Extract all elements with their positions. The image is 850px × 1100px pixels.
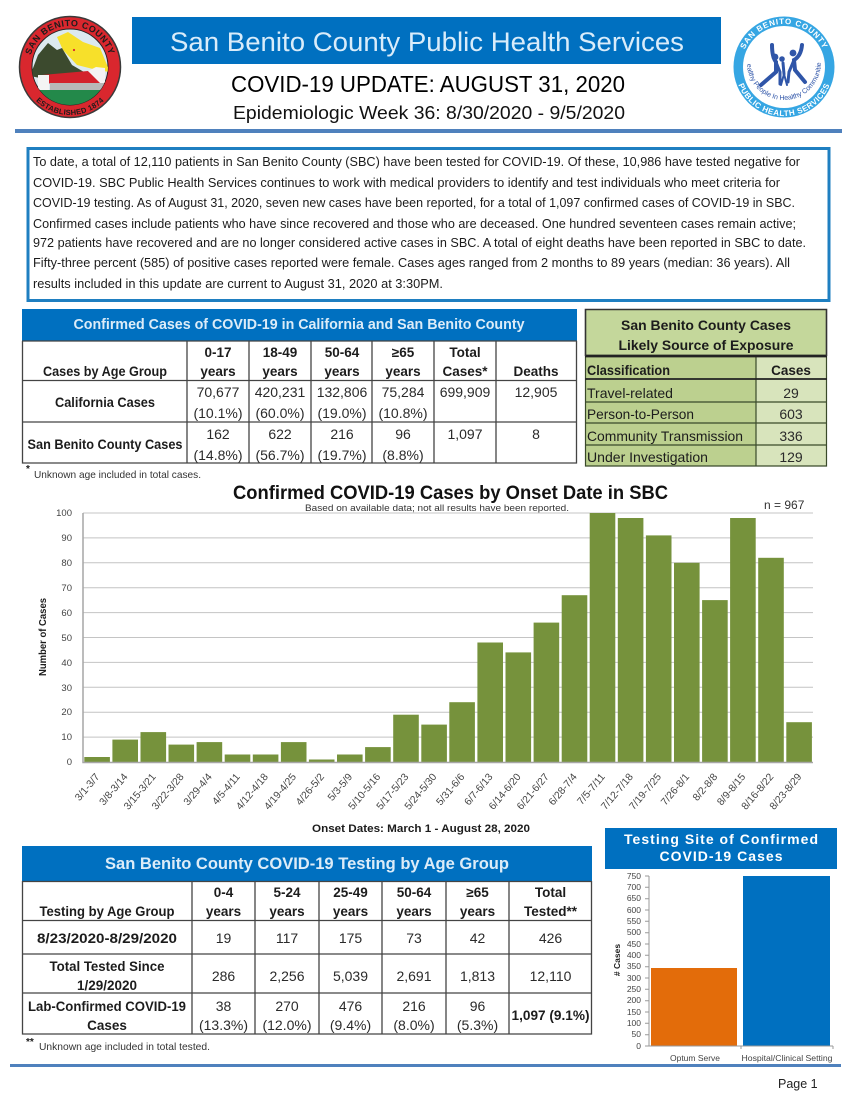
row: lab-confirmed cases: (8.0%) [393,1017,435,1033]
table header row: years [324,364,360,379]
table header row: years [262,364,298,379]
chart subtitle: Based on available data; not all results have been reported. [305,503,569,514]
testing header row: Testing by Age Group [40,904,174,919]
y-axis labels: 100 [56,508,72,519]
testing header row: ≥65 [466,885,489,900]
x-axis date labels: 5/17-5/23 [375,772,411,812]
row: week of 8/23: 42 [470,930,485,946]
row: week of 8/23 [37,930,562,946]
footnote: Unknown age included in total cases. [34,469,201,481]
panel: likely source of exposure table [585,309,827,466]
x-axis date labels: 8/23-8/29 [768,772,805,812]
x-axis date labels: 4/19-4/25 [263,772,299,812]
row: San Benito County cases: (8.8%) [382,447,424,463]
testing site x-axis: Hospital/Clinical Setting [742,1053,833,1063]
row: San Benito County cases: 216 [330,426,354,442]
row: total tested: 2,691 [396,968,432,984]
table header row: ≥65 [392,345,415,360]
testing header row: 25-49 [333,885,368,900]
testing table heading: San Benito County COVID-19 Testing by Age Group [105,854,509,873]
exposure table rows: Travel-related [587,385,673,401]
table header row: Total [449,345,481,360]
testing site y-axis: 250 [627,984,641,994]
table header row: Deaths [513,364,559,379]
table header row: 50-64 [325,345,360,360]
y-axis labels: 60 [61,608,72,619]
sample size note: n = 967 [764,498,805,512]
x-axis date labels: 5/3-5/9 [326,772,355,803]
bar: Optum Serve [651,968,737,1046]
row: San Benito County cases: (19.7%) [317,447,367,463]
testing site y-axis [627,871,649,1051]
logo: Public Health Services: SAN BENITO COUNTY [740,18,828,49]
text block: summary: results included in this update are current to August 31, 2020 at 3:30PM. [33,276,443,291]
x-axis date labels: 6/28-7/4 [547,772,580,808]
testing header row: years [396,904,432,919]
exposure table rows: 129 [779,449,803,465]
row: lab-confirmed cases: (13.3%) [199,1017,248,1033]
row: California cases: (60.0%) [255,405,305,421]
exposure table title: Likely Source of Exposure [618,337,794,353]
row: lab-confirmed cases: 1,097 (9.1%) [512,1008,590,1023]
exposure table rows: 336 [779,428,803,444]
panel: testing site chart [605,828,837,1063]
exposure table title: San Benito County Cases [621,317,791,333]
row: San Benito County cases [28,426,540,463]
y-axis labels: 0 [67,757,72,768]
row: total tested: 2,256 [269,968,305,984]
y-axis labels: 90 [61,533,72,544]
table header row: 18-49 [263,345,297,360]
row: week of 8/23: 117 [276,930,298,946]
row: lab-confirmed cases: 476 [339,998,362,1014]
x-axis date labels: 3/8-3/14 [98,772,131,808]
row: San Benito County cases: (56.7%) [255,447,305,463]
row: lab-confirmed cases: (9.4%) [330,1017,371,1033]
testing table heading [22,846,592,881]
testing footnote: Unknown age included in total tested. [39,1041,210,1053]
text block: summary: Fifty-three percent (585) of positive cases reported were female. Cases ages ranged from 2 months to 89 years (median: 36 years). All [33,255,790,270]
x-axis date labels: 7/5-7/11 [576,772,608,807]
x-axis date labels: 3/15-3/21 [122,772,159,812]
row: total tested [50,959,572,993]
table header row [43,345,559,379]
testing footnote [26,1037,210,1053]
exposure table rows: Person-to-Person [587,406,694,422]
chart title: Confirmed COVID-19 Cases by Onset Date in SBC [233,483,668,504]
testing site x-axis [649,1046,833,1063]
testing site y-axis: 350 [627,961,641,971]
testing site y-axis: 0 [636,1041,641,1051]
testing site y-axis: 550 [627,916,641,926]
row: San Benito County cases: 622 [268,426,292,442]
exposure table rows: Under Investigation [587,449,708,465]
row: lab-confirmed cases: (5.3%) [457,1017,498,1033]
x-axis date labels: 7/12-7/18 [600,772,636,812]
row: lab-confirmed cases: 216 [402,998,426,1014]
testing header row: Total [535,885,566,900]
x-axis date labels: 7/19-7/25 [628,772,664,812]
y-axis labels: 50 [61,633,72,644]
exposure table rows: 603 [779,406,803,422]
row: total tested: Total Tested Since [50,959,165,974]
row: total tested: 1,813 [460,968,495,984]
testing footnote: ** [26,1037,34,1048]
row: San Benito County cases: 1,097 [447,426,483,442]
row: week of 8/23: 8/23/2020-8/29/2020 [37,931,177,946]
divider [15,129,842,133]
testing header row: 50-64 [397,885,432,900]
exposure table rows: 29 [783,385,799,401]
testing site heading: Testing Site of Confirmed [624,831,818,847]
testing header row: years [206,904,241,919]
row: California cases: California Cases [55,395,155,410]
row: California cases: 132,806 [317,384,368,400]
row: San Benito County cases: 8 [532,426,540,442]
testing table grid [22,881,592,1034]
testing site y-axis: 650 [627,893,641,903]
footnote: * [26,464,30,475]
row: week of 8/23: 19 [216,930,231,946]
table header row: years [385,364,421,379]
footnote [26,464,201,481]
row: San Benito County cases: (14.8%) [193,447,243,463]
x-axis date labels: 5/31-6/6 [435,772,468,808]
page number: Page 1 [778,1077,818,1091]
x-axis date labels: 8/9-8/15 [715,772,748,808]
row: week of 8/23: 73 [406,930,422,946]
testing site y-axis: 750 [627,871,641,881]
heading: update date: COVID-19 UPDATE: AUGUST 31, 2020 [231,71,625,97]
testing header row: Tested** [524,904,578,919]
x-axis date labels: 3/22-3/28 [150,772,187,812]
testing site y-axis: 100 [627,1018,641,1028]
row: total tested: 286 [212,968,235,984]
x-axis date labels: 3/29-4/4 [182,772,215,808]
row: total tested: 12,110 [530,968,572,984]
text block: summary: To date, a total of 12,110 patients in San Benito County (SBC) have been tested for COVID-19. Of these, 10,986 have tested negative for [33,154,801,169]
row: California cases: (19.0%) [317,405,367,421]
row: lab-confirmed cases [28,998,590,1033]
table heading: Confirmed Cases of COVID-19 in California and San Benito County [74,317,524,333]
row: lab-confirmed cases: 38 [216,998,231,1014]
testing site y-axis: 200 [627,995,641,1005]
x-axis date labels: 6/14-6/20 [487,772,524,812]
divider [10,1064,841,1067]
row: lab-confirmed cases: 96 [470,998,485,1014]
testing header row: years [269,904,305,919]
panel: testing by age group table [22,846,592,1053]
exposure table rows: Community Transmission [587,428,743,444]
row: San Benito County cases: San Benito County Cases [28,437,182,452]
logo: San Benito County seal: ESTABLISHED 1874 [36,97,104,116]
y-axis labels [56,508,72,768]
heading: epidemiologic week: Epidemiologic Week 36: 8/30/2020 - 9/5/2020 [233,103,625,123]
y-axis labels: 30 [61,683,72,694]
text block: summary: COVID-19 testing. As of August 31, 2020, seven new cases have been reported, for a total of 1,097 confirmed cases of COVID-19 in SBC. [33,195,795,210]
logo: San Benito County seal: SAN BENITO COUNTY [26,20,115,54]
testing site y-axis: 150 [627,1007,641,1017]
row: total tested: 1/29/2020 [77,978,137,993]
row: California cases [55,384,558,421]
x-axis date labels [73,772,805,812]
testing site x-axis: Optum Serve [670,1053,720,1063]
panel: confirmed cases table [22,309,577,481]
bar chart: cases by onset date [37,508,813,835]
testing site y-axis title: # Cases [612,944,622,976]
y-axis labels: 80 [61,558,72,569]
y-axis labels: 20 [61,707,72,718]
y-axis labels: 70 [61,583,72,594]
x-axis date labels: 4/12-4/18 [235,772,271,812]
x-axis title: Onset Dates: March 1 - August 28, 2020 [312,823,530,835]
row: lab-confirmed cases: 270 [275,998,299,1014]
table grid [22,341,577,463]
bar: Hospital/Clinical Setting [743,876,830,1046]
row: California cases: (10.1%) [193,405,243,421]
exposure table rows: Cases [771,363,811,378]
row: week of 8/23: 175 [339,930,362,946]
text block: summary: 972 patients have recovered and are no longer considered active cases in SBC. A total of eight deaths have been reported in SBC to date. [33,235,806,250]
logo: Public Health Services [734,16,834,118]
row: lab-confirmed cases: (12.0%) [262,1017,312,1033]
title banner: San Benito County Public Health Services [170,27,684,57]
testing site y-axis: 450 [627,939,641,949]
logo: San Benito County seal [18,16,122,118]
logo: Public Health Services: PUBLIC HEALTH SERVICES [738,83,829,116]
x-axis date labels: 4/5-4/11 [211,772,243,807]
testing site y-axis: 500 [627,927,641,937]
testing site heading [605,828,837,869]
x-axis date labels: 5/24-5/30 [403,772,440,812]
testing site y-axis: 300 [627,973,641,983]
title banner [132,17,721,64]
exposure table rows [587,363,811,465]
x-axis date labels: 5/10-5/16 [347,772,383,812]
table header row: Cases by Age Group [43,364,167,379]
row: California cases: (10.8%) [378,405,428,421]
text block: summary: COVID-19. SBC Public Health Services continues to work with medical providers to identify and test individuals who meet criteria for [33,175,781,190]
row: California cases: 12,905 [515,384,558,400]
testing site heading: COVID-19 Cases [660,848,783,864]
testing site y-axis: 400 [627,950,641,960]
row: California cases: 699,909 [440,384,491,400]
row: lab-confirmed cases: Lab-Confirmed COVID-19 [28,999,186,1014]
testing site y-axis: 50 [632,1029,641,1039]
testing header row: 5-24 [273,885,301,900]
row: San Benito County cases: 162 [206,426,230,442]
y-axis labels: 40 [61,658,72,669]
table header row: years [200,364,236,379]
x-axis date labels: 8/2-8/8 [691,772,720,803]
testing site y-axis: 700 [627,882,641,892]
row: California cases: 70,677 [197,384,240,400]
x-axis date labels: 3/1-3/7 [73,772,103,803]
x-axis date labels: 8/16-8/22 [740,772,776,812]
testing header row [40,885,578,919]
table heading [22,309,577,341]
testing header row: years [460,904,495,919]
testing site y-axis: 600 [627,905,641,915]
x-axis date labels: 6/21-6/27 [515,772,552,812]
row: San Benito County cases: 96 [395,426,411,442]
row: California cases: 75,284 [382,384,425,400]
row: California cases: 420,231 [255,384,306,400]
testing header row: 0-4 [214,885,234,900]
exposure table title [618,317,794,353]
text block: summary [28,148,829,300]
text block: summary: Confirmed cases include patients who have since recovered and those who are deceased. One hundred seventeen cases remain active; [33,216,796,231]
table header row: Cases* [442,364,488,379]
row: total tested: 5,039 [333,968,368,984]
row: lab-confirmed cases: Cases [87,1018,127,1033]
table header row: 0-17 [204,345,232,360]
x-axis date labels: 4/26-5/2 [294,772,327,808]
y-axis labels: 10 [61,732,72,743]
y-axis title: Number of Cases [37,598,49,676]
x-axis date labels: 6/7-6/13 [463,772,496,808]
x-axis date labels: 7/26-8/1 [659,772,692,808]
testing header row: years [333,904,368,919]
row: week of 8/23: 426 [539,930,562,946]
bars [84,513,812,762]
exposure table rows: Classification [587,363,670,378]
